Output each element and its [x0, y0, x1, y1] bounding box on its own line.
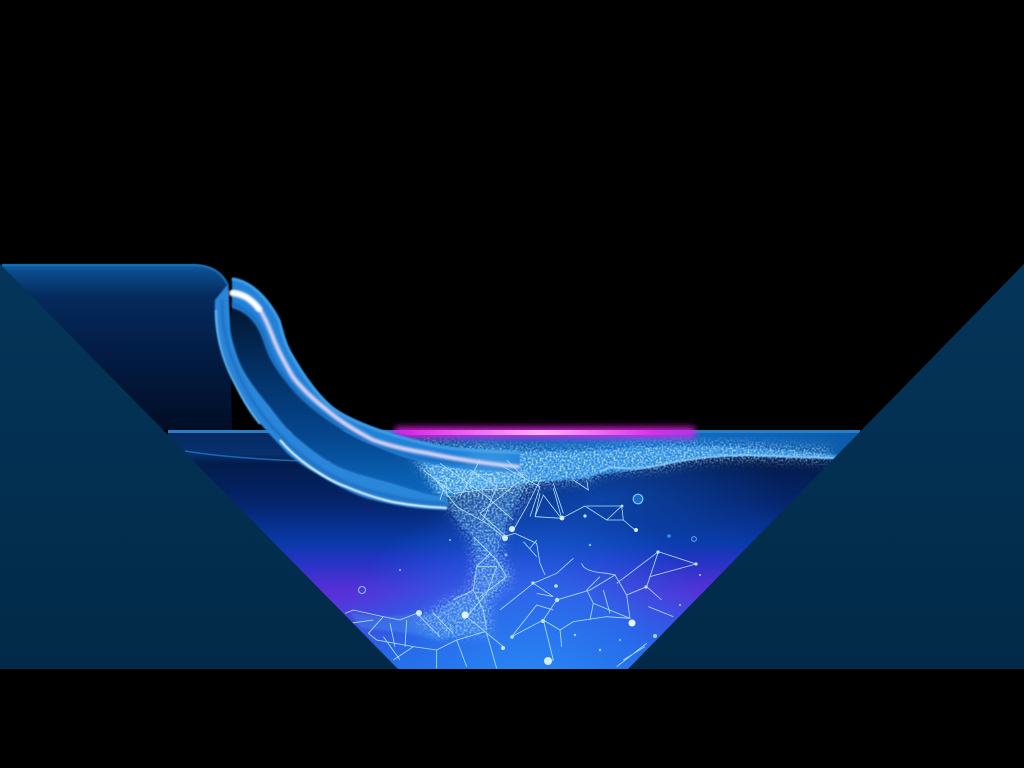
- bottom right strands: [617, 643, 647, 667]
- water surface tint: [382, 433, 858, 482]
- network nodes and bubbles: [358, 444, 701, 665]
- upper left reservoir block: [0, 264, 232, 430]
- right dark triangle: [628, 264, 1024, 669]
- water basin: [168, 430, 860, 669]
- water crest foam band: [413, 440, 840, 494]
- glass tube: inner fill: [230, 308, 520, 497]
- foam web: [423, 460, 563, 630]
- water surface line: [168, 430, 860, 433]
- glass tube: upper band: [232, 278, 520, 472]
- neural network web in water: [345, 460, 696, 668]
- lower right constellation: [500, 552, 696, 662]
- foam ribbon descending through water: [350, 456, 545, 640]
- glass tube: lower band: [215, 284, 447, 510]
- magenta horizon glow: [385, 427, 700, 438]
- mid connectors: [503, 533, 545, 575]
- upper right constellation: [535, 480, 635, 530]
- lower left network: [345, 610, 503, 668]
- illustration: water flowing into glowing basin: [0, 263, 1024, 669]
- bottom black band: [0, 669, 1024, 768]
- left dark triangle: [0, 264, 398, 669]
